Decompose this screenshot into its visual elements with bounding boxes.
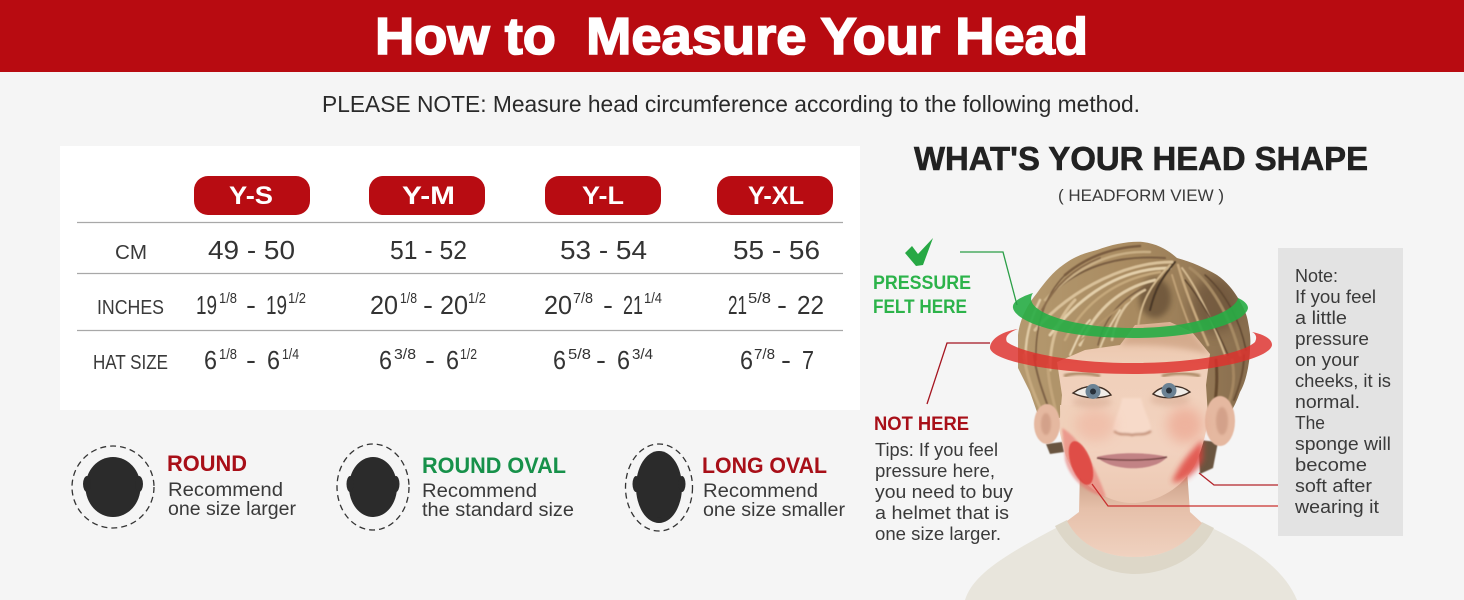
head shape: long oval bbox=[626, 444, 846, 531]
brows bbox=[1064, 373, 1200, 376]
eyes bbox=[1073, 383, 1190, 399]
text: note: cheeks, it is bbox=[1295, 371, 1391, 391]
heading: head shape: WHAT'S YOUR HEAD SHAPE bbox=[914, 140, 1368, 177]
row: hat size: 1/8 bbox=[219, 346, 237, 363]
green ring: pressure zone bbox=[1013, 293, 1248, 338]
red ring: not here bbox=[990, 329, 1272, 374]
row: inches: - bbox=[777, 290, 787, 320]
icon: green check bbox=[905, 238, 933, 266]
row: hat size: - bbox=[596, 345, 606, 375]
row: inches: 21 bbox=[623, 290, 643, 320]
mouth bbox=[1097, 453, 1167, 468]
row: inches: 1/2 bbox=[288, 290, 306, 307]
icon: round head bbox=[83, 457, 143, 517]
text: round oval recommendation: Recommend bbox=[422, 481, 537, 502]
row: hat size: 6 bbox=[617, 345, 630, 375]
face bbox=[1056, 322, 1210, 503]
forehead shadow bbox=[1120, 322, 1210, 354]
row: inches: 19 bbox=[266, 290, 287, 320]
size pill: Y-S bbox=[194, 176, 310, 215]
row: CM bbox=[115, 235, 820, 265]
boy portrait bbox=[965, 235, 1297, 600]
collar bbox=[1055, 520, 1214, 574]
ear inner shadow bbox=[1041, 407, 1228, 435]
row: CM: 49 - 50 bbox=[208, 235, 295, 265]
text: note: become bbox=[1295, 455, 1367, 475]
subheading: headform view: ( HEADFORM VIEW ) bbox=[1058, 186, 1224, 205]
text: note: on your bbox=[1295, 350, 1359, 370]
row: hat size: 6 bbox=[204, 345, 217, 375]
text: round recommendation: Recommend bbox=[168, 480, 283, 501]
size pill: Y-M: Y-M bbox=[402, 182, 455, 210]
text: tips bbox=[875, 440, 1013, 544]
panel: size table bbox=[60, 146, 860, 410]
text: long oval recommendation bbox=[703, 481, 846, 521]
icon: round oval head bbox=[346, 457, 400, 517]
row: hat size: 7/8 bbox=[754, 346, 775, 363]
text: round recommendation bbox=[168, 480, 297, 520]
row: inches: 1/8 bbox=[400, 290, 417, 307]
row: CM: 53 - 54 bbox=[560, 235, 647, 265]
label: long oval: LONG OVAL bbox=[702, 453, 827, 478]
text: note: normal. bbox=[1295, 392, 1360, 412]
row: inches: 19 bbox=[196, 290, 217, 320]
note line: PLEASE NOTE: Measure head circumference according to the following method. bbox=[322, 91, 1140, 117]
text: note: pressure bbox=[1295, 329, 1369, 349]
text: note: If you feel bbox=[1295, 287, 1376, 307]
row: inches: 22 bbox=[797, 290, 824, 320]
size pill: Y-L: Y-L bbox=[582, 182, 624, 210]
neck bbox=[1067, 470, 1202, 557]
hair: top, fringe and sides bbox=[1018, 242, 1250, 418]
text: round oval recommendation: the standard size bbox=[422, 500, 574, 521]
row: hat size: - bbox=[246, 345, 256, 375]
eye shadows bbox=[1072, 394, 1190, 408]
text: note: soft after bbox=[1295, 476, 1372, 496]
text: long oval recommendation: Recommend bbox=[703, 481, 818, 502]
text: note bbox=[1294, 266, 1391, 517]
row: inches: 20 bbox=[370, 290, 398, 320]
cheek pressure zones bbox=[1062, 407, 1203, 497]
row: hat size: 6 bbox=[740, 345, 753, 375]
text: round oval recommendation bbox=[422, 481, 574, 521]
row: hat size: 6 bbox=[553, 345, 566, 375]
row: hat size: 5/8 bbox=[568, 346, 591, 363]
row: hat size: 3/4 bbox=[632, 346, 653, 363]
row: hat size: 1/2 bbox=[460, 346, 477, 363]
lower face edge over ears bbox=[1060, 405, 1080, 456]
label: pressure felt here: FELT HERE bbox=[873, 297, 967, 318]
row: hat size: 6 bbox=[379, 345, 392, 375]
row: inches: INCHES bbox=[97, 297, 164, 319]
text: note: sponge will bbox=[1295, 434, 1391, 454]
head shape: round bbox=[72, 446, 297, 528]
row: inches: 5/8 bbox=[748, 290, 771, 307]
label: pressure felt here: PRESSURE bbox=[873, 273, 971, 294]
text: note: The bbox=[1295, 413, 1325, 433]
row: inches: 1/2 bbox=[468, 290, 486, 307]
row: inches: 7/8 bbox=[573, 290, 593, 307]
header banner bbox=[0, 0, 1464, 72]
size pill: Y-L bbox=[545, 176, 661, 215]
leader line: left cheek bbox=[1092, 484, 1278, 506]
row: hat size: HAT SIZE bbox=[93, 352, 168, 374]
text: tips: a helmet that is bbox=[875, 503, 1009, 523]
label: pressure felt here bbox=[873, 273, 971, 318]
text: round recommendation: one size larger bbox=[168, 499, 297, 520]
leader line: green bbox=[960, 252, 1017, 305]
label: not here: NOT HERE bbox=[874, 414, 969, 435]
text: note: wearing it bbox=[1294, 497, 1379, 517]
row: hat size bbox=[93, 345, 814, 375]
leader line: red ring bbox=[927, 343, 990, 404]
label: round oval: ROUND OVAL bbox=[422, 453, 566, 478]
row: hat size: - bbox=[781, 345, 791, 375]
size pill: Y-M bbox=[369, 176, 485, 215]
row: inches: 20 bbox=[440, 290, 468, 320]
row: CM: 55 - 56 bbox=[733, 235, 820, 265]
row: hat size: 1/4 bbox=[282, 346, 299, 363]
label: round: ROUND bbox=[167, 451, 247, 476]
row: inches: 1/8 bbox=[219, 290, 237, 307]
text: note: a little bbox=[1295, 308, 1347, 328]
row: hat size: 6 bbox=[267, 345, 280, 375]
head shape: round oval bbox=[337, 444, 574, 530]
row: hat size: - bbox=[425, 345, 435, 375]
ears bbox=[1034, 396, 1235, 446]
row: CM: 51 - 52 bbox=[390, 235, 467, 265]
nose bbox=[1113, 398, 1151, 435]
title: How to Measure Your Head bbox=[375, 8, 1088, 66]
row: hat size: 3/8 bbox=[394, 346, 416, 363]
text: tips: pressure here, bbox=[875, 461, 995, 481]
row: CM: CM bbox=[115, 242, 147, 264]
row: inches bbox=[97, 290, 824, 320]
row: hat size: 7 bbox=[802, 345, 814, 375]
size pill: Y-S: Y-S bbox=[229, 182, 273, 210]
text: long oval recommendation: one size smaller bbox=[703, 500, 846, 521]
text: tips: you need to buy bbox=[875, 482, 1013, 502]
row: inches: 1/4 bbox=[644, 290, 662, 307]
row: inches: 21 bbox=[728, 290, 747, 320]
row: inches: - bbox=[246, 290, 256, 320]
shirt bbox=[965, 514, 1297, 600]
row: hat size: 6 bbox=[446, 345, 459, 375]
text: tips: one size larger. bbox=[875, 524, 1001, 544]
text: note: Note: bbox=[1295, 266, 1338, 286]
icon: long oval head bbox=[632, 451, 686, 523]
text: tips: Tips: If you feel bbox=[875, 440, 998, 460]
size pill: Y-XL: Y-XL bbox=[748, 182, 804, 210]
hair behind ears bbox=[1046, 440, 1218, 474]
row: inches: - bbox=[423, 290, 433, 320]
size pill: Y-XL bbox=[717, 176, 833, 215]
row: inches: - bbox=[603, 290, 613, 320]
panel: note bbox=[1278, 248, 1403, 536]
leader line: right cheek bbox=[1199, 473, 1278, 485]
row: inches: 20 bbox=[544, 290, 572, 320]
